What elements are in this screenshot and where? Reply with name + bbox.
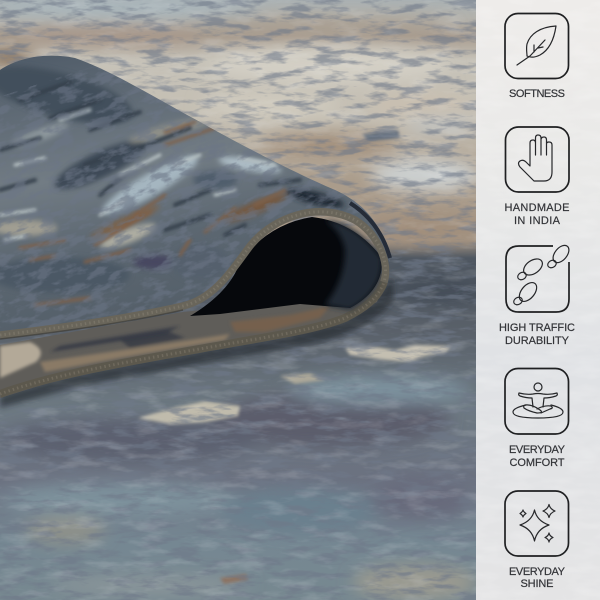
upper rug edge binding [0, 203, 390, 339]
floor weave texture [0, 0, 476, 600]
label: everyday comfort: EVERYDAY [509, 444, 566, 456]
label: high traffic durability [499, 322, 575, 347]
label: handmade in india: HANDMADE [504, 202, 570, 214]
rug weave flecks [0, 82, 300, 305]
lower rug edge binding [0, 282, 384, 394]
icon: meditating person [505, 368, 568, 434]
cream floor flecks [138, 130, 452, 584]
label: softness: SOFTNESS [509, 88, 565, 100]
label: high traffic durability: HIGH TRAFFIC [499, 322, 575, 334]
lower rug flap [0, 270, 388, 398]
shadow under rug [0, 275, 394, 408]
feature: everyday comfort [505, 368, 568, 469]
label: everyday comfort [509, 444, 566, 469]
label: handmade in india: IN INDIA [514, 215, 561, 227]
rug pattern patches [0, 54, 346, 293]
label: everyday comfort: COMFORT [510, 457, 565, 469]
label: handmade in india [504, 202, 570, 227]
icon: footprints [506, 242, 572, 312]
sidebar panel [476, 0, 600, 600]
icon: feather [505, 14, 568, 78]
label: everyday shine: EVERYDAY [509, 566, 566, 578]
dark inside of rug curl [190, 217, 382, 316]
feature: softness [505, 14, 568, 100]
upper rug surface [0, 56, 390, 330]
icon: hand [506, 127, 569, 192]
feature: handmade in india [504, 127, 570, 227]
icon: sparkles [505, 491, 568, 556]
feature: everyday shine [505, 491, 568, 590]
label: everyday shine: SHINE [520, 578, 554, 590]
label: high traffic durability: DURABILITY [505, 335, 570, 347]
feature: high traffic durability [499, 242, 575, 347]
label: everyday shine [509, 566, 566, 590]
